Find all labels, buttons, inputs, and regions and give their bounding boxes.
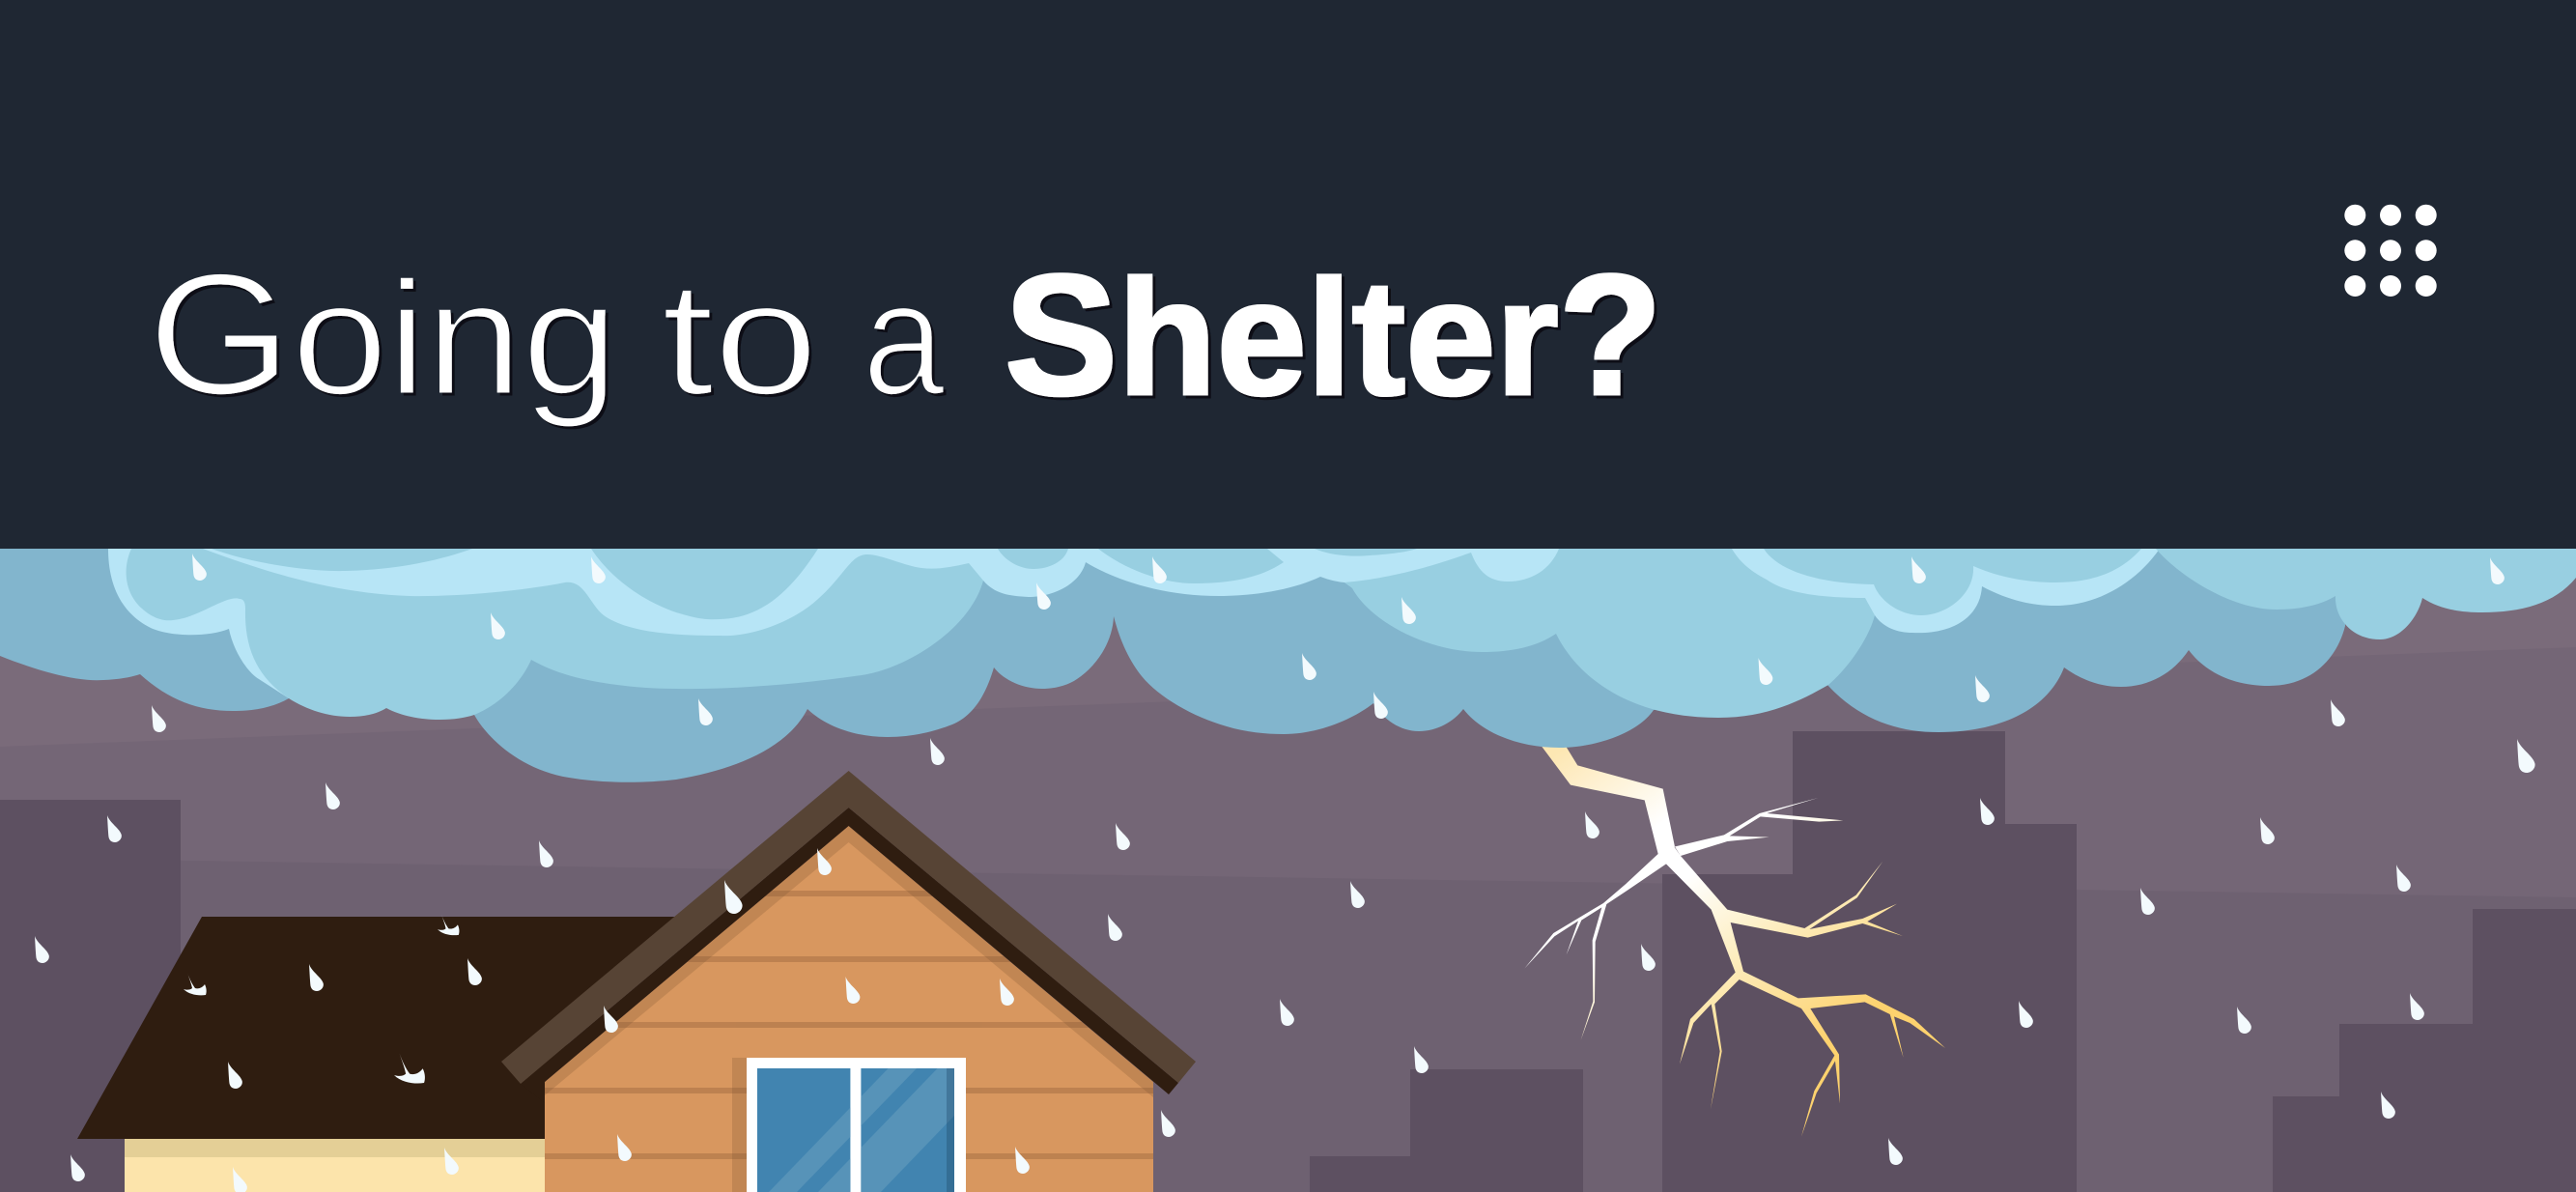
header band xyxy=(0,0,2576,549)
title: Going xyxy=(148,238,618,432)
stormy sky xyxy=(0,549,2576,1192)
roof underside xyxy=(521,808,1178,1103)
title xyxy=(148,238,1662,432)
window xyxy=(747,1058,966,1192)
city skyline buildings xyxy=(0,731,2576,1192)
icon: nine dot grid xyxy=(2344,205,2437,297)
wooden gable wall xyxy=(541,826,1159,1192)
title: Shelter? xyxy=(1005,239,1662,431)
lightning bolt xyxy=(1524,734,1945,1137)
cream side wall xyxy=(125,1139,545,1192)
cloud mid layer xyxy=(127,549,2576,720)
lower roof xyxy=(77,917,676,1139)
cloud back layer xyxy=(0,549,2345,782)
storm cloud xyxy=(0,549,2576,782)
title: a xyxy=(863,247,946,429)
house xyxy=(77,771,1196,1192)
rain drops xyxy=(35,553,2535,1192)
cloud highlight layer xyxy=(108,549,2160,698)
title: to xyxy=(662,247,818,429)
roof trim xyxy=(501,771,1196,1084)
